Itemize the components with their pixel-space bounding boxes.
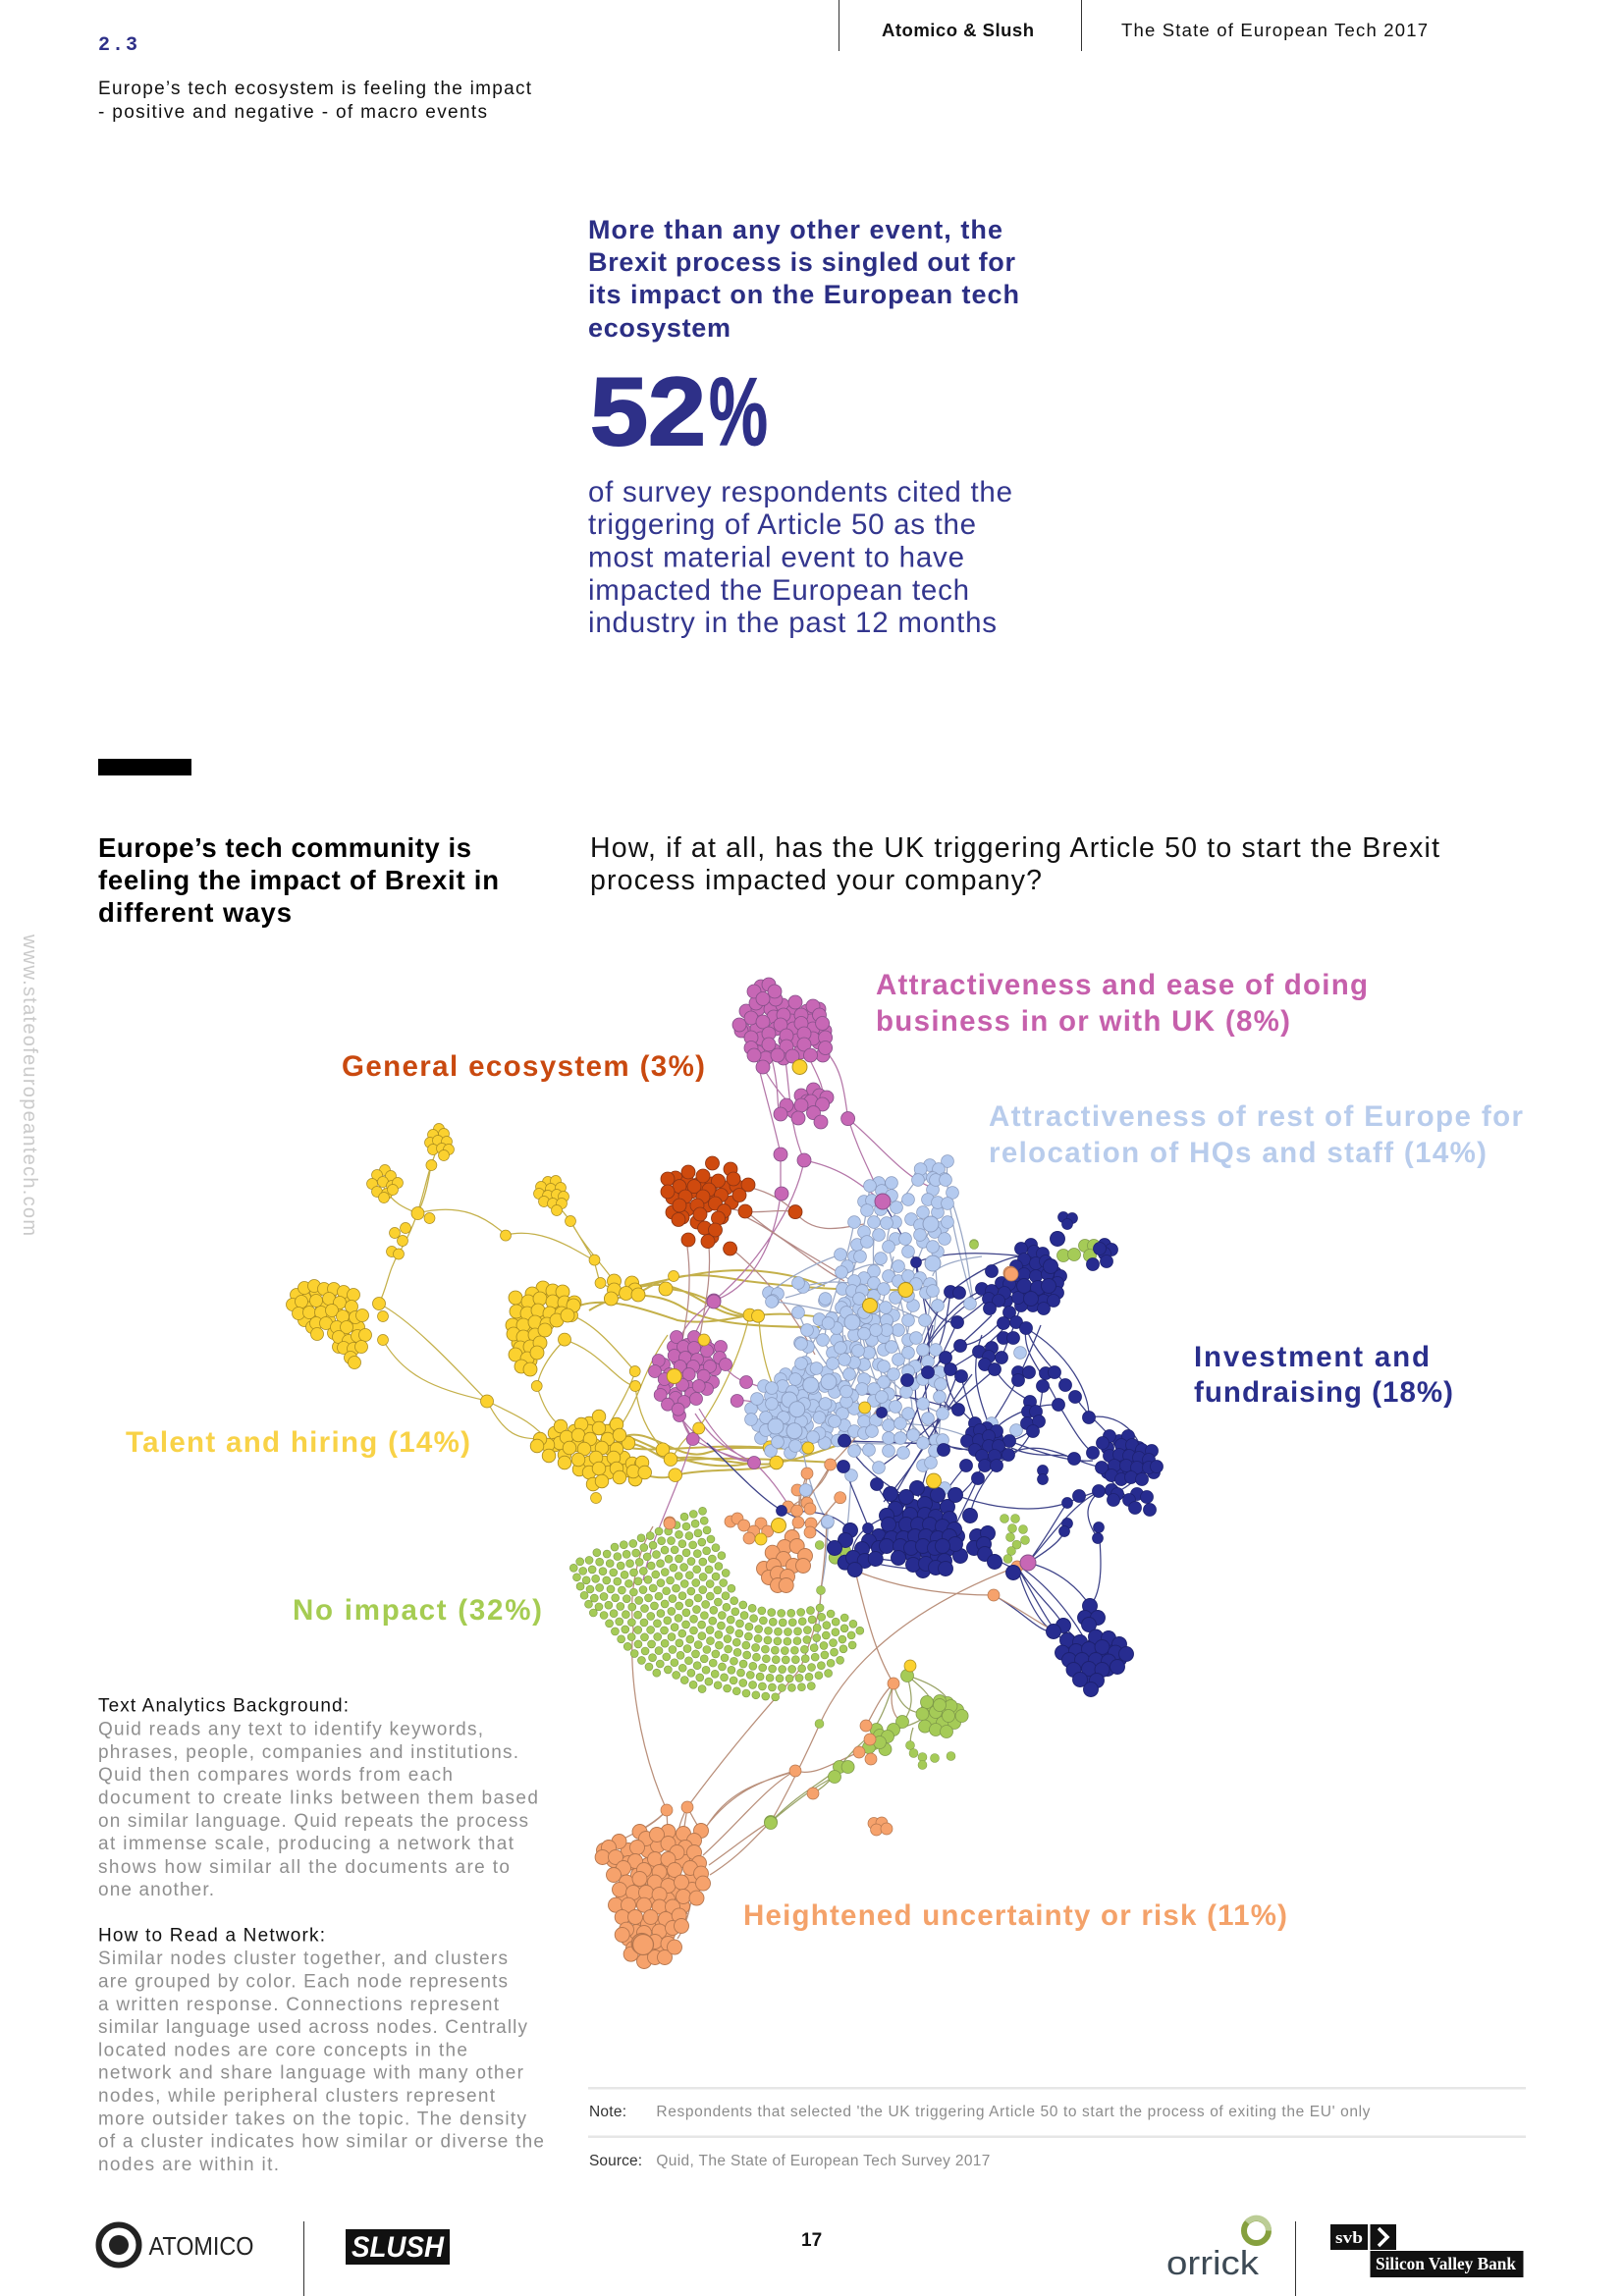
text block: text analytics background: Quid then compares words from each xyxy=(98,1765,453,1786)
text block: how to read a network: of a cluster indicates how similar or diverse the xyxy=(98,2132,544,2153)
key statement heading: ecosystem xyxy=(588,313,731,343)
cluster: investment and fundraising (navy) xyxy=(782,1217,1157,1689)
label: general ecosystem: General ecosystem (3%) xyxy=(342,1050,705,1083)
text block: text analytics background: Quid reads any text to identify keywords, xyxy=(98,1720,483,1740)
stat description xyxy=(588,476,1012,639)
cluster: attractiveness of Europe (light blue) xyxy=(751,1161,1020,1522)
vertical website url: www.stateofeuropeantech.com xyxy=(19,934,40,1236)
key statement heading: Brexit process is singled out for xyxy=(588,247,1015,277)
text block: text analytics background xyxy=(98,1695,538,1900)
key statement heading: More than any other event, the xyxy=(588,215,1002,244)
label: heightened uncertainty: Heightened uncertainty or risk (11%) xyxy=(743,1899,1287,1932)
chart heading: feeling the impact of Brexit in xyxy=(98,865,499,895)
text block: how to read a network: Similar nodes cluster together, and clusters xyxy=(98,1949,508,1969)
text block: text analytics background: one another. xyxy=(98,1880,214,1900)
footer logo: Silicon Valley Bank: svb xyxy=(1335,2228,1363,2247)
survey question xyxy=(590,832,1439,896)
note and source: Respondents that selected 'the UK triggering Article 50 to start the process of exiting the EU' only xyxy=(656,2104,1371,2120)
label: investment and fundraising xyxy=(1194,1341,1453,1409)
footer logo: Silicon Valley Bank xyxy=(1330,2224,1524,2277)
stat description: of survey respondents cited the xyxy=(588,476,1012,508)
label: attractiveness of Europe: relocation of HQs and staff (14%) xyxy=(989,1137,1487,1169)
section subtitle: - positive and negative - of macro events xyxy=(98,102,487,123)
chart heading xyxy=(98,832,499,928)
edges: light blue xyxy=(766,1161,982,1649)
footer divider right xyxy=(1295,2221,1296,2296)
label: attractiveness of UK: Attractiveness and ease of doing xyxy=(876,969,1368,1001)
label: investment and fundraising: fundraising (18%) xyxy=(1194,1376,1453,1409)
stat description: impacted the European tech xyxy=(588,574,969,607)
text block: how to read a network: network and share language with many other xyxy=(98,2063,524,2084)
cluster: talent and hiring (yellow) xyxy=(293,1129,777,1498)
note and source: Source: xyxy=(589,2153,642,2169)
chart heading: different ways xyxy=(98,897,292,928)
text block: text analytics background: shows how similar all the documents are to xyxy=(98,1857,510,1878)
survey question: process impacted your company? xyxy=(590,865,1042,896)
section subtitle xyxy=(98,79,532,123)
note and source: Note: xyxy=(589,2104,626,2120)
survey question: How, if at all, has the UK triggering Article 50 to start the Brexit xyxy=(590,832,1439,864)
cluster: heightened uncertainty (orange) xyxy=(603,1273,1017,1961)
text block: how to read a network: located nodes are core concepts in the xyxy=(98,2040,467,2060)
note and source xyxy=(588,2087,1526,2169)
header divider and report names: The State of European Tech 2017 xyxy=(1121,20,1428,40)
text block: how to read a network: How to Read a Network: xyxy=(98,1925,325,1946)
text block: how to read a network: nodes are within it. xyxy=(98,2155,279,2175)
cluster: no impact (green fan) xyxy=(572,1244,1094,1823)
key statement heading: its impact on the European tech xyxy=(588,280,1019,309)
label: investment and fundraising: Investment and xyxy=(1194,1341,1430,1373)
label: talent and hiring: Talent and hiring (14%) xyxy=(126,1426,470,1459)
label: attractiveness of UK xyxy=(876,969,1368,1038)
edges: yellow xyxy=(379,1144,903,1477)
text block: how to read a network xyxy=(98,1925,544,2175)
text block: how to read a network: more outsider takes on the topic. The density xyxy=(98,2109,526,2129)
big stat: 52%: 52 xyxy=(590,357,706,465)
black section marker bar xyxy=(98,759,191,775)
edges: navy xyxy=(707,1201,1149,1649)
edges: pink and red xyxy=(643,1050,933,1580)
cluster: attractiveness of UK (pink) xyxy=(655,985,848,1463)
edges: orange and green xyxy=(619,1404,1060,1953)
text block: how to read a network: are grouped by color. Each node represents xyxy=(98,1971,508,1992)
big stat: 52% xyxy=(590,357,768,465)
big stat: 52%: % xyxy=(709,357,768,465)
note and source: Quid, The State of European Tech Survey 2017 xyxy=(656,2153,990,2169)
text block: how to read a network: similar language used across nodes. Centrally xyxy=(98,2017,528,2038)
page number: 17 xyxy=(801,2230,822,2251)
text block: how to read a network: nodes, while peripheral clusters represent xyxy=(98,2086,496,2107)
footer divider left xyxy=(303,2221,304,2296)
text block: text analytics background: phrases, people, companies and institutions. xyxy=(98,1742,518,1763)
chart heading: Europe’s tech community is xyxy=(98,832,471,863)
footer logo: Atomico: ATOMICO xyxy=(149,2231,253,2261)
label: attractiveness of Europe xyxy=(989,1100,1524,1169)
header divider and report names: Atomico & Slush xyxy=(882,20,1034,40)
running header: section number: 2.3 xyxy=(98,34,137,57)
outlier nodes placed over other clusters xyxy=(675,1067,1028,1666)
footer logo: Silicon Valley Bank: Silicon Valley Bank xyxy=(1376,2254,1516,2273)
key statement heading xyxy=(588,215,1019,343)
text block: text analytics background: Text Analytics Background: xyxy=(98,1695,349,1716)
section subtitle: Europe’s tech ecosystem is feeling the impact xyxy=(98,79,532,99)
stat description: most material event to have xyxy=(588,542,964,573)
text block: text analytics background: on similar language. Quid repeats the process xyxy=(98,1811,528,1832)
text block: how to read a network: a written response. Connections represent xyxy=(98,1995,500,2015)
footer logo: Slush: SLUSH xyxy=(352,2231,445,2264)
network chart xyxy=(293,985,1157,1961)
footer logo: Atomico xyxy=(98,2224,253,2266)
text block: text analytics background: document to create links between them based xyxy=(98,1789,538,1809)
text block: text analytics background: at immense scale, producing a network that xyxy=(98,1834,514,1854)
stat description: industry in the past 12 months xyxy=(588,607,997,639)
stat description: triggering of Article 50 as the xyxy=(588,508,976,541)
header divider and report names xyxy=(839,0,1428,51)
cluster: general ecosystem (red) xyxy=(668,1163,795,1249)
label: attractiveness of UK: business in or with UK (8%) xyxy=(876,1005,1290,1038)
footer logo: Orrick: orrick xyxy=(1166,2245,1260,2282)
footer logo: Orrick xyxy=(1166,2218,1269,2282)
label: attractiveness of Europe: Attractiveness of rest of Europe for xyxy=(989,1100,1524,1133)
label: no impact: No impact (32%) xyxy=(293,1594,542,1627)
